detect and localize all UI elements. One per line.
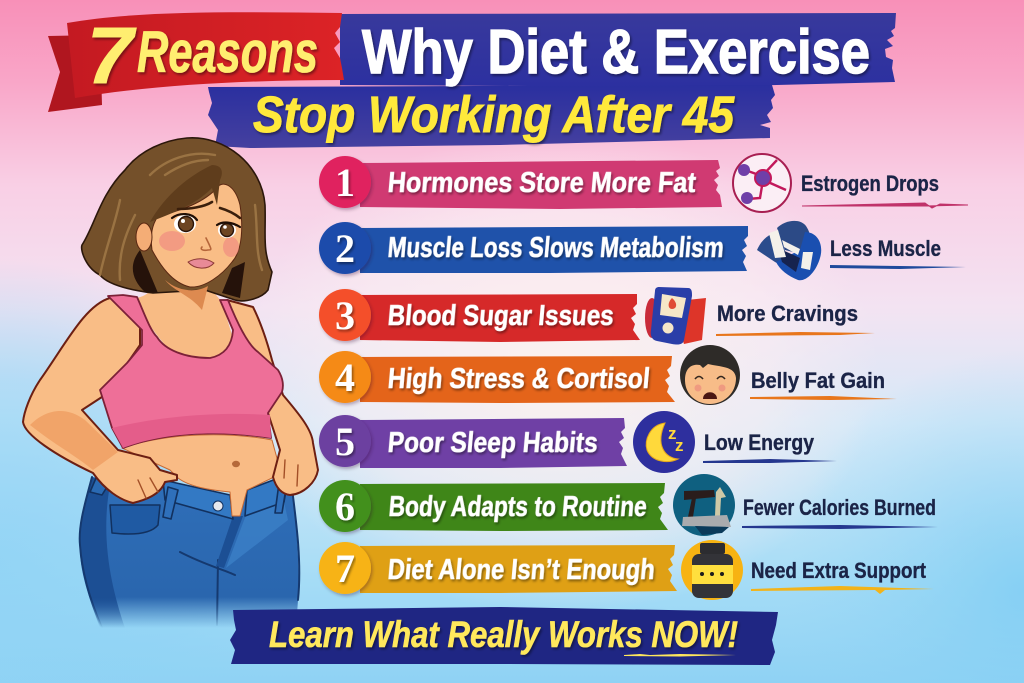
- number 1: 1: [335, 160, 355, 205]
- reason 2 row: [319, 221, 966, 280]
- icon: glucose meter: [645, 287, 706, 345]
- underline 5: [703, 459, 837, 463]
- underline 6: [742, 525, 938, 529]
- icon: hormone network: [733, 154, 791, 212]
- eyebrows: [178, 202, 240, 218]
- label: Low Energy: Low Energy: [704, 430, 815, 455]
- heading: 7 Reasons: 7: [87, 11, 137, 100]
- left arm and hand: [23, 298, 177, 503]
- bar 4: [360, 356, 675, 403]
- hair highlights: [100, 154, 262, 280]
- bar 6: [360, 483, 668, 531]
- reason 1 row: [319, 154, 968, 212]
- reason 6 text: Body Adapts to Routine: [387, 491, 648, 523]
- ear: [136, 223, 152, 251]
- red ribbon tail: [48, 35, 102, 112]
- label: Belly Fat Gain: Belly Fat Gain: [751, 368, 885, 393]
- number 7: 7: [335, 546, 355, 591]
- number 2 badge: [319, 222, 371, 274]
- icon: moon and zzz: z: [675, 436, 684, 455]
- number 5 badge: [319, 415, 371, 467]
- underline 2: [830, 265, 966, 269]
- number 5: 5: [335, 419, 355, 464]
- number 4: 4: [335, 355, 355, 400]
- waistband: [90, 474, 289, 519]
- underline 3: [716, 332, 875, 336]
- pink tank top: [100, 295, 283, 448]
- icon: moon and zzz: [633, 411, 695, 473]
- reason 5 row: [319, 411, 837, 473]
- navel: [232, 461, 240, 467]
- reason 6 row: [319, 474, 938, 536]
- label: Estrogen Drops: Estrogen Drops: [801, 171, 939, 196]
- reason 3 text: Blood Sugar Issues: [386, 300, 615, 332]
- jeans: [80, 473, 299, 628]
- NOW underline: [624, 654, 736, 656]
- icon: stressed face: [680, 345, 740, 405]
- hair back: [82, 138, 272, 301]
- reason 4 row: [319, 345, 897, 405]
- fringe lock: [150, 165, 222, 222]
- cheeks: [159, 231, 239, 257]
- reason 1 text: Hormones Store More Fat: [386, 167, 697, 199]
- icon: moon and zzz: z: [668, 424, 676, 443]
- heading: 7 Reasons: Reasons: [137, 20, 318, 85]
- reason 4 text: High Stress & Cortisol: [386, 363, 651, 395]
- reason 7 text: Diet Alone Isn’t Enough: [386, 554, 656, 586]
- reason 5 text: Poor Sleep Habits: [386, 427, 599, 459]
- illustration: worried woman holding open jeans: [23, 138, 318, 628]
- eyes: [172, 214, 240, 238]
- heading: Why Diet and Exercise: Why Diet & Exercise: [362, 18, 870, 87]
- icon: dumbbell: [757, 221, 821, 280]
- number 2: 2: [335, 226, 355, 271]
- label: Less Muscle: Less Muscle: [830, 236, 941, 261]
- bar 7: [360, 545, 677, 593]
- tank top folds: [112, 414, 271, 448]
- blue title band: line one: [340, 13, 896, 87]
- number 1 badge: [319, 156, 371, 208]
- number 3 badge: [319, 289, 371, 341]
- label: Need Extra Support: Need Extra Support: [751, 558, 927, 583]
- reason 7 row: [319, 540, 934, 600]
- bar 5: [360, 418, 627, 468]
- belly: [122, 435, 278, 516]
- number 7 badge: [319, 542, 371, 594]
- hair shadow: [133, 250, 245, 298]
- label: Fewer Calories Burned: Fewer Calories Burned: [743, 495, 936, 520]
- title banner: [48, 11, 896, 148]
- call to action text: Learn What Really Works NOW!: [269, 614, 738, 655]
- underline 4: [750, 396, 897, 400]
- right arm: [227, 300, 318, 495]
- neck shadow: [165, 280, 208, 310]
- mouth: [188, 259, 214, 268]
- number 6 badge: [319, 480, 371, 532]
- heading: Stop Working After 45: Stop Working After 45: [253, 86, 735, 143]
- number 6: 6: [335, 484, 355, 529]
- bar 3: [360, 294, 640, 342]
- left arm shading: [30, 411, 118, 470]
- label: More Cravings: More Cravings: [717, 301, 858, 326]
- jeans button: [213, 501, 223, 511]
- red ribbon: [67, 12, 344, 98]
- underline 1: [802, 203, 968, 208]
- right hand fingers detail: [138, 460, 298, 498]
- underline 7: [751, 586, 934, 594]
- banner background: [230, 607, 778, 665]
- nose: [201, 238, 211, 250]
- icon: treadmill: [673, 474, 735, 536]
- reason 2 text: Muscle Loss Slows Metabolism: [386, 232, 725, 264]
- reasons list: [319, 154, 968, 600]
- face: [151, 184, 242, 287]
- blue title band: line two: [208, 85, 775, 148]
- heading: 7 Reasons: [87, 11, 318, 100]
- number 4 badge: [319, 351, 371, 403]
- reason 3 row: [319, 287, 875, 345]
- number 3: 3: [335, 293, 355, 338]
- call to action banner: [230, 607, 778, 665]
- bar 1: [360, 160, 722, 209]
- icon: supplement jar: [681, 540, 743, 600]
- bar 2: [360, 226, 748, 273]
- neck and chest: [132, 272, 235, 358]
